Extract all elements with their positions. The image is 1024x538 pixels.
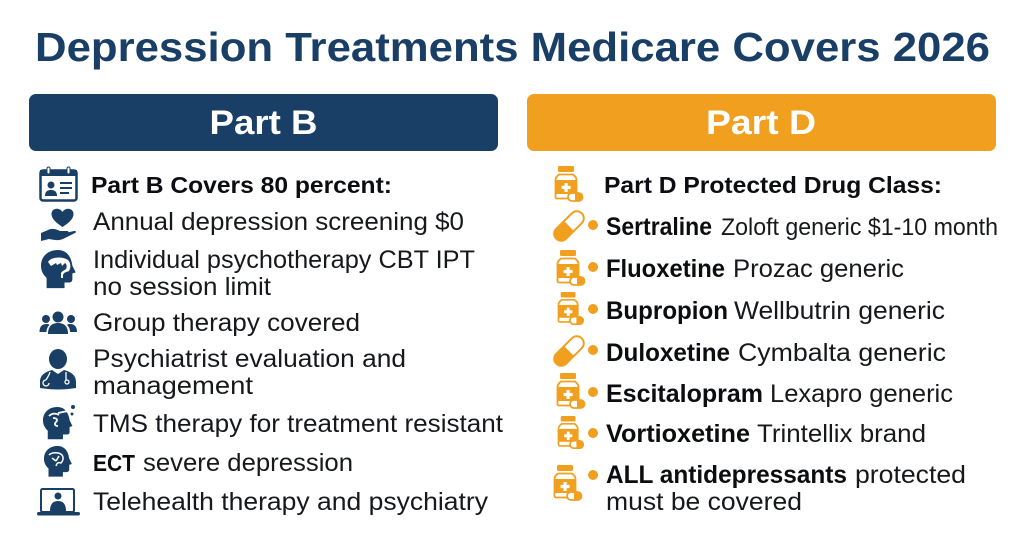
text: psychiatrist xyxy=(93,345,406,400)
panel: Part D list xyxy=(551,166,998,516)
text: all antidepressants xyxy=(606,461,966,516)
icon: calendar id card xyxy=(40,167,77,200)
icon: bottle xyxy=(558,250,584,285)
text: bupropion: Bupropion xyxy=(606,297,728,325)
icon: bottle xyxy=(558,373,584,408)
text: ECT: ECT xyxy=(93,450,135,476)
panel: Part D header xyxy=(527,94,996,151)
icon: bottle xyxy=(556,166,582,201)
panel: Part B list xyxy=(37,167,503,516)
text: fluoxetine: Prozac generic xyxy=(733,255,904,283)
text: psychiatrist: Psychiatrist evaluation and xyxy=(93,345,406,373)
text: all antidepressants: must be covered xyxy=(606,488,802,516)
text: duloxetine: Cymbalta generic xyxy=(738,339,946,367)
text: telehealth: Telehealth therapy and psychiatry xyxy=(93,488,489,516)
text: sertraline: Zoloft generic $1-10 month xyxy=(721,214,998,241)
bullet xyxy=(588,262,598,272)
text: ECT: severe depression xyxy=(143,449,353,477)
text: individual psychotherapy: Individual psychotherapy CBT IPT xyxy=(93,246,475,274)
icon: bottle xyxy=(554,465,582,500)
panel: Part D header: Part D xyxy=(706,104,816,142)
icon: bottle xyxy=(558,416,583,448)
text: duloxetine: Duloxetine xyxy=(606,339,730,367)
icon: brain head xyxy=(41,250,76,288)
text: escitalopram: Lexapro generic xyxy=(770,380,953,408)
bullet xyxy=(588,470,598,480)
text: vortioxetine: Trintellix brand xyxy=(757,420,926,448)
text: bupropion: Wellbutrin generic xyxy=(734,297,945,325)
icon: heart in hand xyxy=(41,209,76,241)
text: psychiatrist: management xyxy=(93,372,253,400)
text: screening: Annual depression screening $0 xyxy=(93,208,464,236)
text: group therapy: Group therapy covered xyxy=(93,309,360,337)
text: all antidepressants: protected xyxy=(855,461,966,489)
text: all antidepressants: ALL antidepressants xyxy=(606,461,847,489)
heading: Part D protected class: Part D Protected Drug Class: xyxy=(604,172,942,198)
bullet xyxy=(588,428,598,438)
title: Depression Treatments Medicare Covers 2026 xyxy=(35,24,990,70)
icon: group of people xyxy=(40,312,77,334)
icon: psychiatrist xyxy=(40,349,76,390)
text: individual psychotherapy: no session limit xyxy=(93,273,271,301)
heading: Part B covers: Part B Covers 80 percent: xyxy=(91,172,392,198)
icon: bottle xyxy=(558,292,583,324)
text: individual psychotherapy xyxy=(93,246,475,301)
bullet xyxy=(588,220,598,230)
bullet xyxy=(588,387,598,397)
bullet xyxy=(588,345,598,355)
icon: ECT head xyxy=(44,446,72,477)
text: escitalopram: Escitalopram xyxy=(606,380,763,408)
text: sertraline: Sertraline xyxy=(606,213,712,241)
panel: Part B header: Part B xyxy=(210,104,318,142)
text: vortioxetine: Vortioxetine xyxy=(606,420,750,448)
bullet xyxy=(588,304,598,314)
icon: capsule xyxy=(551,208,587,244)
icon: telehealth laptop xyxy=(37,489,80,516)
icon: capsule xyxy=(551,333,587,369)
icon: TMS head xyxy=(43,405,75,439)
panel: Part B header xyxy=(29,94,498,151)
text: fluoxetine: Fluoxetine xyxy=(606,255,725,283)
text: TMS: TMS therapy for treatment resistant xyxy=(93,410,503,438)
